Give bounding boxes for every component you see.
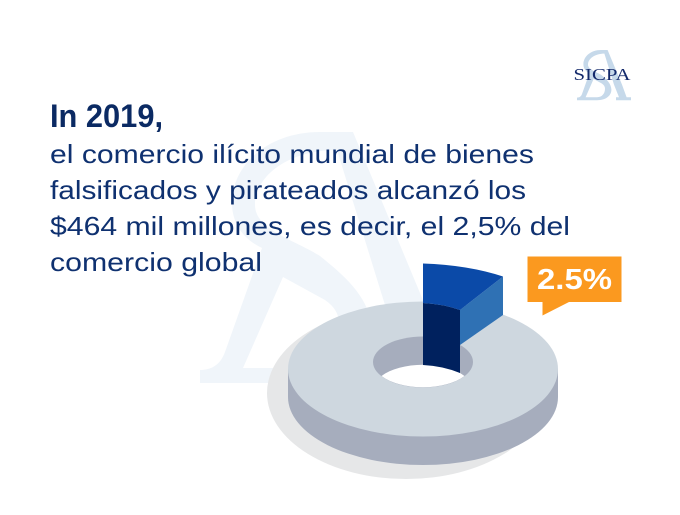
logo: SICPA — [574, 50, 631, 100]
watermark monogram — [200, 132, 470, 383]
slice top — [423, 264, 503, 310]
callout: 2.5% — [528, 256, 622, 316]
donut chart — [267, 264, 558, 479]
body text — [50, 139, 570, 277]
body text: $464 mil millones, es decir, el 2,5% del — [50, 211, 570, 241]
body text: el comercio ilícito mundial de bienes — [50, 139, 534, 169]
slice side face — [460, 276, 503, 345]
donut side — [288, 369, 558, 465]
donut hole — [373, 336, 473, 388]
shadow — [267, 307, 545, 479]
heading: In 2019, — [50, 98, 163, 134]
donut top — [288, 302, 558, 436]
slice inner face — [423, 303, 460, 373]
hole opening — [382, 365, 464, 387]
logo wordmark: SICPA — [574, 65, 631, 84]
body text: falsificados y pirateados alcanzó los — [50, 175, 526, 205]
body text: comercio global — [50, 247, 262, 277]
callout: 2.5%: 2.5% — [537, 264, 612, 296]
logo monogram — [577, 50, 631, 100]
